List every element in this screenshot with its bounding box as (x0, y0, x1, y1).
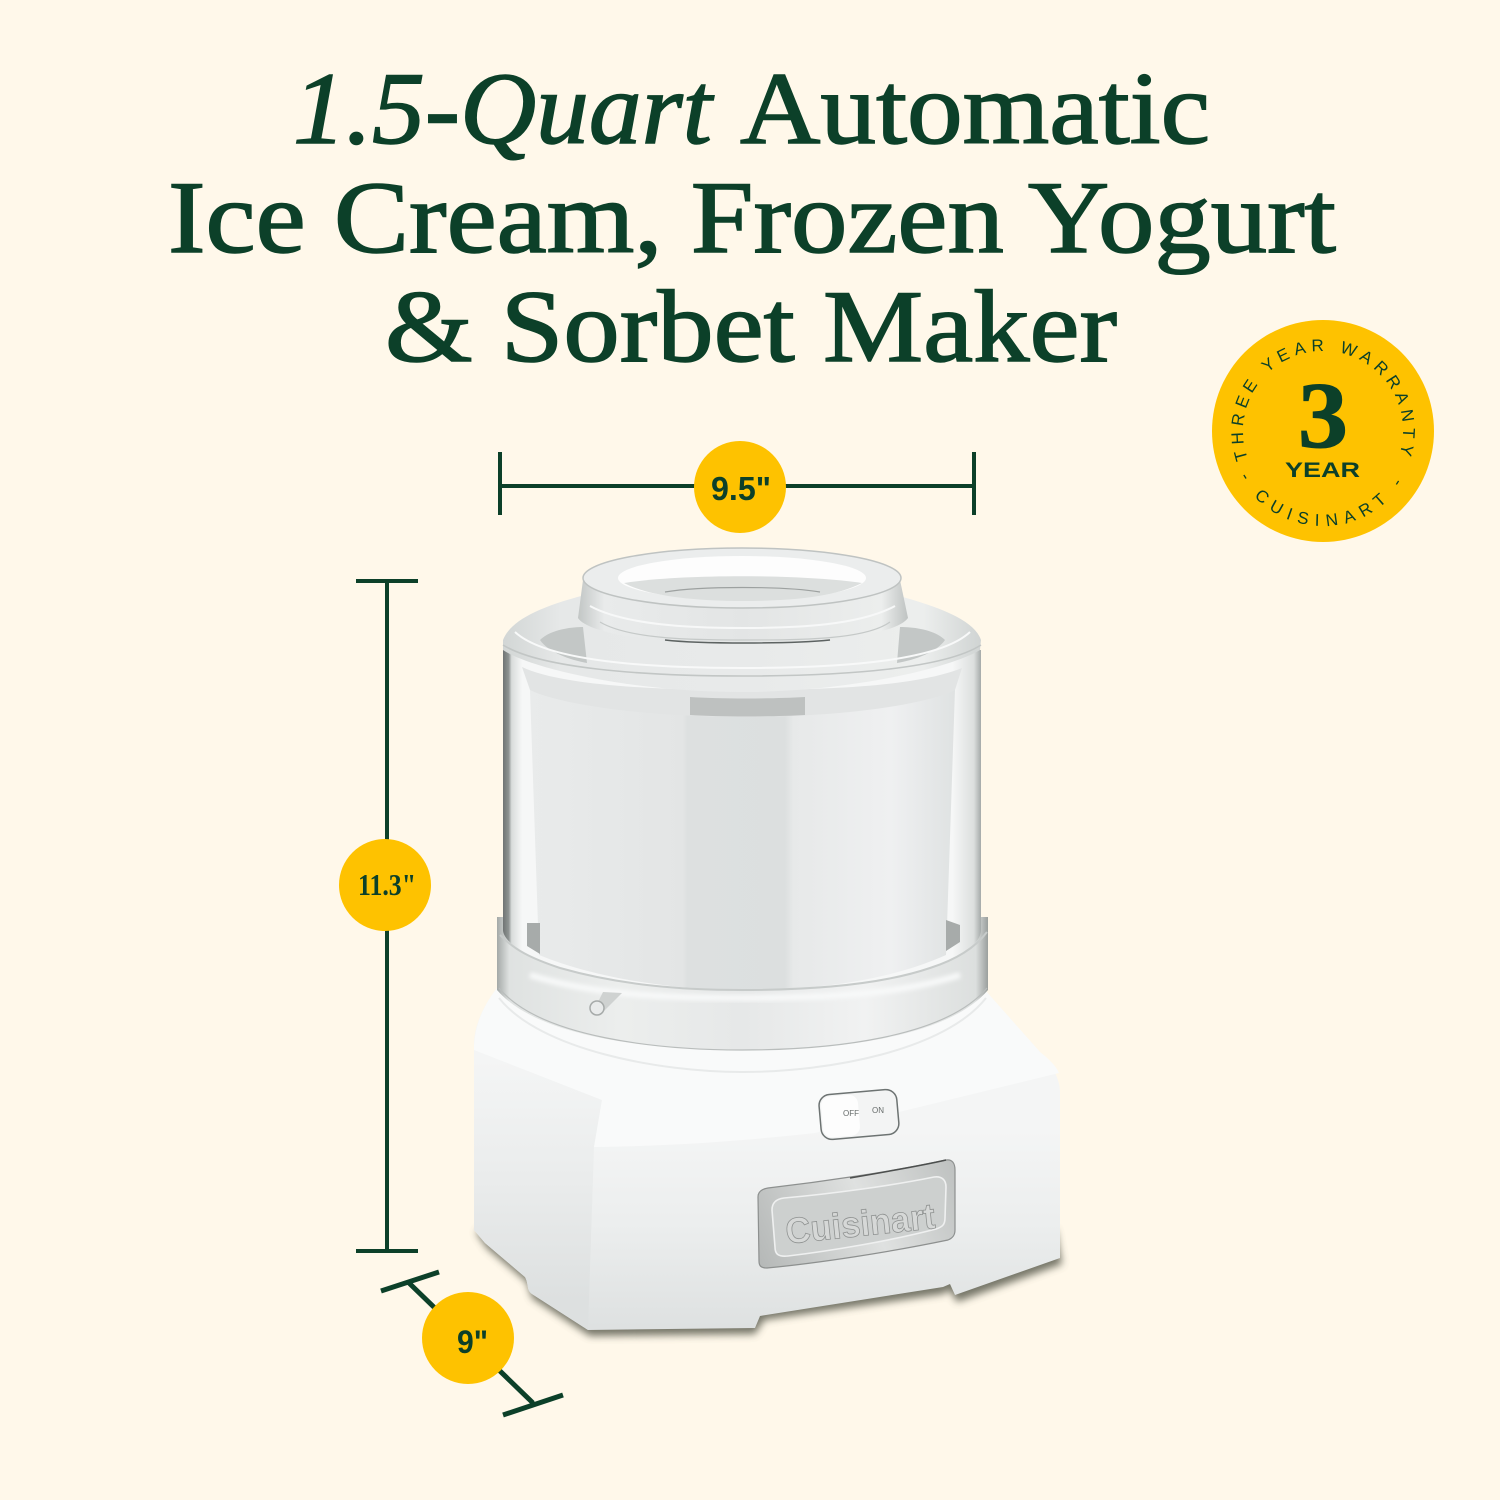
power switch (818, 1089, 900, 1140)
clear outer bowl (503, 650, 981, 990)
title line 1 regular: Automatic (740, 52, 1210, 166)
title (168, 52, 1336, 384)
collar latch (590, 992, 622, 1015)
badge curved text: three year warranty: THREE YEAR WARRANTY (1231, 340, 1415, 462)
badge label year: YEAR (1285, 459, 1360, 482)
bowl base pockets (527, 923, 540, 954)
power switch: ON (872, 1106, 884, 1115)
white base (474, 988, 1060, 1330)
bowl rim shadow (690, 697, 805, 716)
lid chute (578, 548, 908, 644)
ice cream maker product (474, 548, 1062, 1336)
depth dimension (381, 1272, 563, 1415)
depth dimension: 9" (457, 1324, 488, 1360)
power switch: OFF (843, 1109, 859, 1118)
warranty badge (1212, 320, 1434, 542)
title line 2: Ice Cream, Frozen Yogurt (168, 161, 1336, 275)
collar rim line (500, 932, 987, 990)
width dimension (500, 441, 974, 533)
badge numeral 3: 3 (1298, 364, 1348, 468)
base top face (474, 988, 1059, 1147)
width dimension: 9.5" (711, 470, 771, 507)
bowl rim band (522, 667, 962, 717)
lid inner pockets (540, 627, 945, 663)
clear lid (503, 595, 981, 692)
height dimension (339, 581, 431, 1251)
lid edge lines (503, 645, 981, 676)
base front silhouette (474, 988, 1060, 1330)
cuisinart nameplate (758, 1160, 955, 1268)
badge curved text: cuisinart: - CUISINART - (1243, 474, 1400, 526)
collar seat line (499, 998, 986, 1072)
title line 3: & Sorbet Maker (385, 270, 1117, 384)
transparent collar (497, 917, 988, 1050)
cuisinart nameplate: Cuisinart (783, 1195, 937, 1252)
height dimension: 11.3" (358, 867, 416, 902)
base left face (474, 1050, 602, 1330)
base shadow (476, 1220, 1062, 1336)
title line 1 italic: 1.5-Quart (293, 52, 714, 166)
white freezer bowl (500, 667, 987, 990)
